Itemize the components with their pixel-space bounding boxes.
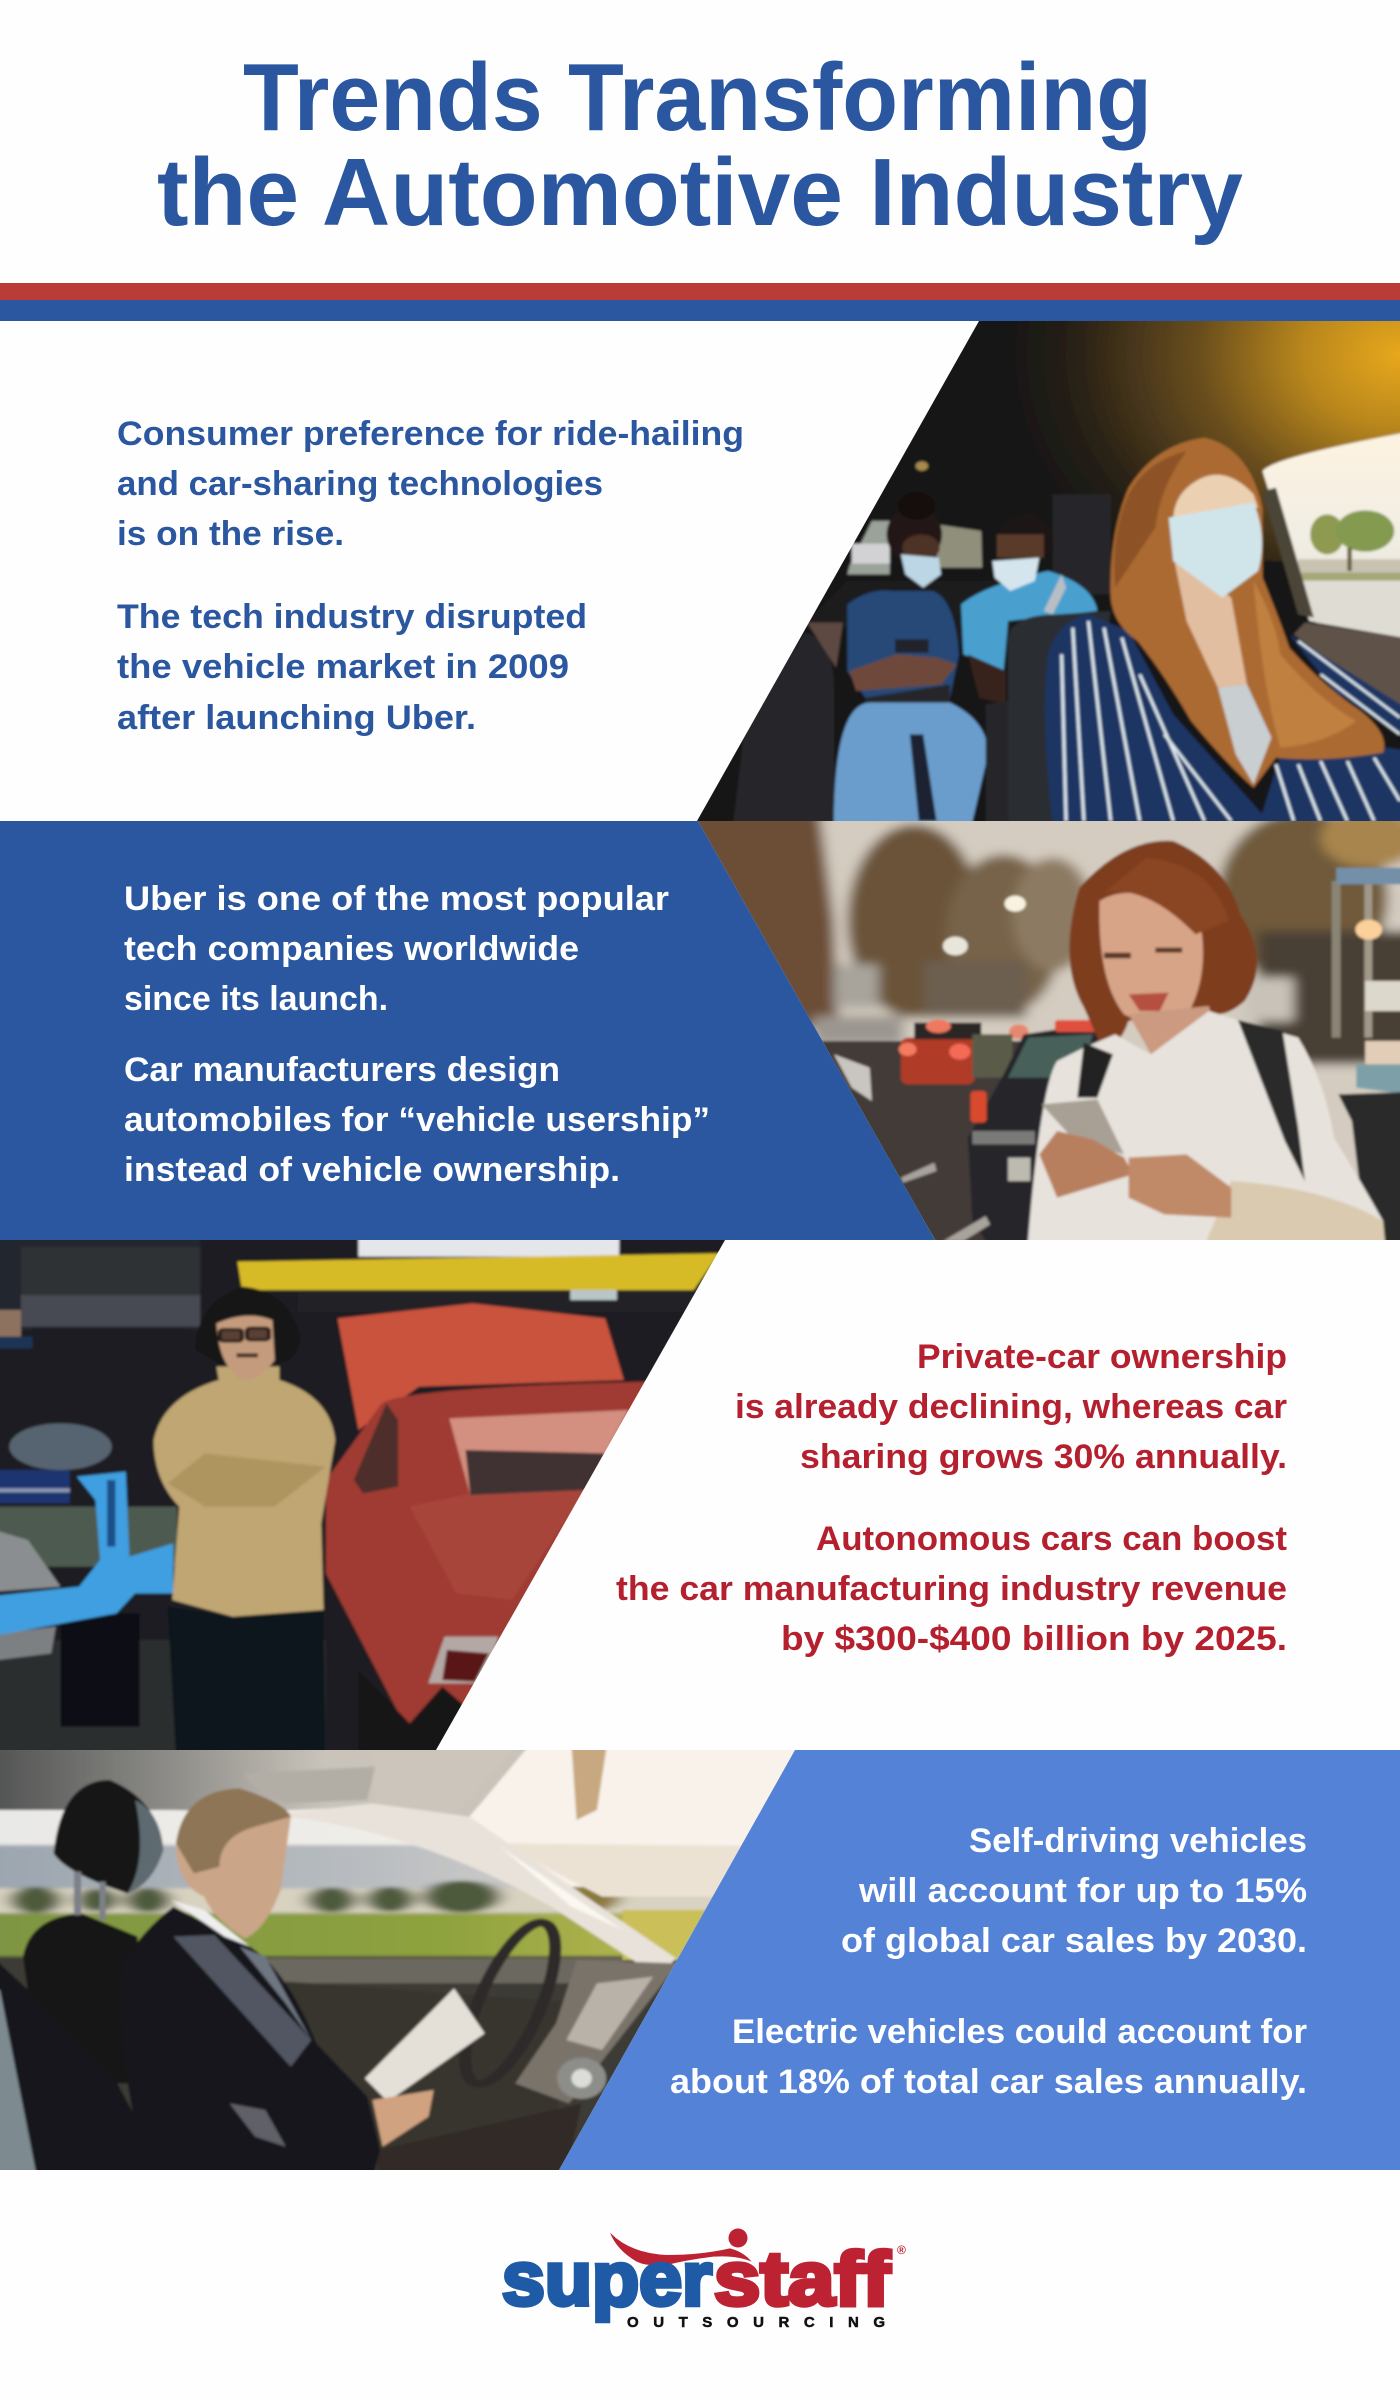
- text: private-car ownership: is already declining, whereas car: [735, 1388, 1287, 1426]
- text: self-driving vehicles: [670, 1822, 1307, 2101]
- windscreen: [476, 1750, 795, 1889]
- text: self-driving vehicles: Electric vehicles could account for: [732, 2013, 1307, 2051]
- text: ride-hailing preference: after launching Uber.: [117, 699, 476, 737]
- female passenger: [885, 511, 944, 557]
- photo: woman on phone in street: [698, 821, 1400, 1240]
- head: [176, 1788, 291, 1938]
- door and dash: [265, 1958, 622, 1983]
- blue frame: [0, 1472, 173, 1640]
- text: ride-hailing preference: is on the rise.: [117, 515, 344, 553]
- face: [1099, 893, 1203, 1021]
- man: [168, 1608, 326, 1750]
- male passenger: [1044, 533, 1046, 535]
- text: ride-hailing preference: and car-sharing technologies: [117, 465, 603, 503]
- windshield: [449, 1410, 629, 1495]
- car body: [326, 1382, 652, 1750]
- text: private-car ownership: sharing grows 30% annually.: [800, 1438, 1287, 1476]
- suit: [126, 1906, 380, 2170]
- text: Uber popularity: [124, 880, 710, 1189]
- text: private-car ownership: Autonomous cars can boost: [816, 1520, 1287, 1558]
- blouse: [1045, 614, 1400, 841]
- text: Uber popularity: Uber is one of the most popular: [124, 880, 669, 918]
- hair: [1069, 841, 1257, 1048]
- text: Uber popularity: tech companies worldwide: [124, 930, 579, 968]
- shirt: [1026, 1011, 1383, 1268]
- logo swoosh: [610, 2233, 752, 2265]
- logo tagline: OUTSOURCING: [627, 2314, 885, 2331]
- logo: SuperStaff Outsourcing: [502, 2228, 906, 2331]
- logo figure head: [728, 2228, 748, 2248]
- logo wordmark: super: [502, 2237, 712, 2322]
- registered mark: ®: [897, 2243, 906, 2257]
- window: [1263, 428, 1400, 643]
- tail light and lower car: [428, 1637, 498, 1683]
- hair: [1110, 438, 1384, 788]
- mask: [1169, 503, 1262, 598]
- blue text polygon: [0, 821, 935, 1240]
- text: Uber popularity: since its launch.: [124, 980, 388, 1018]
- front seat: [0, 1963, 147, 2170]
- title: [157, 44, 1243, 246]
- text: ride-hailing preference: [117, 415, 744, 737]
- door: [1292, 621, 1400, 706]
- text: ride-hailing preference: Consumer preference for ride-hailing: [117, 415, 744, 453]
- headliner: [0, 1750, 526, 1818]
- face: [1173, 475, 1258, 521]
- text: ride-hailing preference: The tech industry disrupted: [117, 598, 587, 636]
- rear windows: [847, 521, 890, 574]
- logo wordmark: staff: [714, 2237, 891, 2322]
- left seat: [733, 633, 834, 821]
- text: private-car ownership: [616, 1338, 1287, 1658]
- pillar: [286, 1803, 676, 1977]
- text: ride-hailing preference: the vehicle market in 2009: [117, 648, 569, 686]
- lights and street furniture: [1004, 896, 1026, 912]
- blue text polygon: [559, 1750, 1400, 2170]
- text: self-driving vehicles: of global car sales by 2030.: [841, 1922, 1307, 1960]
- paper and hand: [365, 1988, 485, 2102]
- cars: [901, 1038, 975, 1084]
- photo: man with red car in garage: [0, 1240, 725, 1750]
- text: Uber popularity: instead of vehicle ownership.: [124, 1151, 620, 1189]
- photo: man reading in autonomous car: [0, 1750, 795, 2170]
- rear seat: [23, 1913, 138, 2083]
- text: self-driving vehicles: Self-driving vehicles: [969, 1822, 1307, 1860]
- logo wordmark: [502, 2237, 891, 2322]
- panel: ride-hailing preference: [117, 301, 1400, 848]
- panel: private-car ownership: [0, 1220, 1287, 1773]
- text: Uber popularity: automobiles for “vehicle usership”: [124, 1101, 710, 1139]
- text: private-car ownership: Private-car ownership: [917, 1338, 1287, 1376]
- legs: [378, 2104, 581, 2170]
- hands and phone: [1042, 1099, 1124, 1154]
- front seat: [1008, 611, 1111, 841]
- header stripes: [0, 283, 1400, 321]
- title: the Automotive Industry: [157, 139, 1243, 246]
- text: self-driving vehicles: will account for up to 15%: [858, 1872, 1307, 1910]
- text: Uber popularity: Car manufacturers design: [124, 1051, 560, 1089]
- text: self-driving vehicles: about 18% of total car sales annually.: [670, 2063, 1307, 2101]
- photo: masked driver and passengers: [697, 321, 1400, 821]
- text: private-car ownership: by $300-$400 billion by 2025.: [781, 1620, 1287, 1658]
- panel: Uber popularity: [0, 821, 1400, 1240]
- hood: [338, 1303, 624, 1430]
- jacket on arm: [1206, 1180, 1388, 1240]
- panel: self-driving vehicles: [0, 1730, 1400, 2197]
- text: private-car ownership: the car manufacturing industry revenue: [616, 1570, 1287, 1608]
- title: Trends Transforming: [243, 44, 1152, 151]
